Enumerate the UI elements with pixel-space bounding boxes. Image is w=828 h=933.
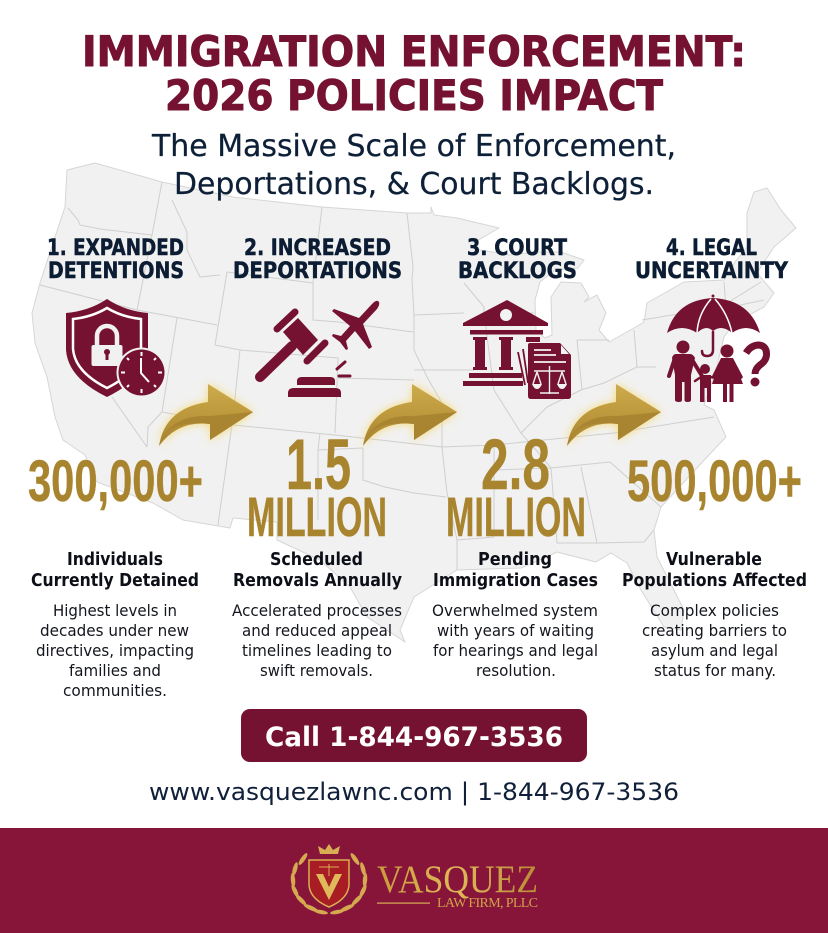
description: with years of waiting bbox=[437, 621, 594, 640]
subheading: Pending bbox=[478, 549, 552, 570]
heading: UNCERTAINTY bbox=[635, 259, 789, 284]
panel: expanded detentions bbox=[28, 236, 203, 700]
subheading: Individuals bbox=[67, 549, 163, 570]
subheading: Removals Annually bbox=[233, 570, 402, 591]
panel: legal uncertainty bbox=[622, 236, 807, 680]
wordmark: VASQUEZ bbox=[377, 858, 538, 901]
description: decades under new bbox=[40, 621, 189, 640]
description: asylum and legal bbox=[651, 641, 778, 660]
description: communities. bbox=[63, 681, 167, 700]
heading: 1. EXPANDED bbox=[47, 236, 184, 261]
icon: shield with lock and clock bbox=[66, 299, 166, 398]
heading: 2. INCREASED bbox=[244, 236, 391, 261]
description bbox=[432, 601, 598, 680]
subheading: Scheduled bbox=[270, 549, 363, 570]
subheading: Immigration Cases bbox=[433, 570, 598, 591]
description: Highest levels in bbox=[53, 601, 177, 620]
title bbox=[82, 27, 746, 120]
logo: Vasquez Law Firm bbox=[290, 844, 538, 915]
subtitle bbox=[151, 129, 676, 202]
subheading: Populations Affected bbox=[622, 570, 807, 591]
heading: DETENTIONS bbox=[48, 259, 184, 284]
description: Overwhelmed system bbox=[432, 601, 598, 620]
subheading bbox=[233, 549, 402, 591]
description: families and bbox=[69, 661, 161, 680]
arrow: step 2 to 3 bbox=[363, 384, 457, 446]
description bbox=[36, 601, 194, 700]
contact line: www.vasquezlawnc.com | 1-844-967-3536 bbox=[149, 778, 679, 806]
subtitle: The Massive Scale of Enforcement, bbox=[151, 129, 676, 164]
description: Complex policies bbox=[650, 601, 779, 620]
description: and reduced appeal bbox=[242, 621, 392, 640]
description: creating barriers to bbox=[642, 621, 787, 640]
heading: 4. LEGAL bbox=[666, 236, 757, 261]
subheading bbox=[622, 549, 807, 591]
icon: laurel wreath, crown and shield bbox=[290, 844, 368, 915]
title: 2026 POLICIES IMPACT bbox=[165, 71, 663, 120]
description: timelines leading to bbox=[242, 641, 392, 660]
statistic bbox=[446, 426, 586, 548]
statistic: MILLION bbox=[446, 485, 586, 548]
heading bbox=[233, 236, 402, 284]
panel: increased deportations bbox=[232, 236, 402, 680]
heading: DEPORTATIONS bbox=[233, 259, 402, 284]
call button bbox=[241, 709, 587, 762]
map of the United States bbox=[32, 163, 796, 642]
description: Accelerated processes bbox=[232, 601, 402, 620]
description: status for many. bbox=[654, 661, 776, 680]
icon: family under umbrella with question mark bbox=[667, 294, 767, 402]
description: swift removals. bbox=[260, 661, 373, 680]
statistic: MILLION bbox=[247, 485, 387, 548]
description bbox=[642, 601, 787, 680]
heading bbox=[458, 236, 577, 284]
panel: court backlogs bbox=[432, 236, 598, 680]
description: directives, impacting bbox=[36, 641, 194, 660]
subheading: Currently Detained bbox=[31, 570, 199, 591]
subheading bbox=[31, 549, 199, 591]
statistic: 2.8 bbox=[481, 426, 550, 505]
arrow: step 3 to 4 bbox=[567, 384, 661, 446]
heading: BACKLOGS bbox=[458, 259, 577, 284]
subheading bbox=[433, 549, 598, 591]
call button: Call 1-844-967-3536 bbox=[265, 722, 563, 753]
description: resolution. bbox=[476, 661, 556, 680]
footer band bbox=[0, 828, 828, 933]
title: IMMIGRATION ENFORCEMENT: bbox=[82, 27, 746, 76]
description: for hearings and legal bbox=[433, 641, 598, 660]
heading bbox=[635, 236, 789, 284]
subtitle: Deportations, & Court Backlogs. bbox=[174, 167, 654, 202]
subheading: Vulnerable bbox=[666, 549, 762, 570]
heading: 3. COURT bbox=[467, 236, 567, 261]
heading bbox=[47, 236, 184, 284]
icon: courthouse and legal document bbox=[463, 300, 571, 399]
statistic bbox=[247, 426, 387, 548]
arrow: step 1 to 2 bbox=[159, 384, 253, 446]
statistic: 300,000+ bbox=[28, 449, 203, 514]
icon: gavel and airplane bbox=[260, 301, 379, 397]
tagline: LAW FIRM, PLLC bbox=[437, 896, 538, 911]
statistic: 1.5 bbox=[286, 426, 351, 505]
description bbox=[232, 601, 402, 680]
